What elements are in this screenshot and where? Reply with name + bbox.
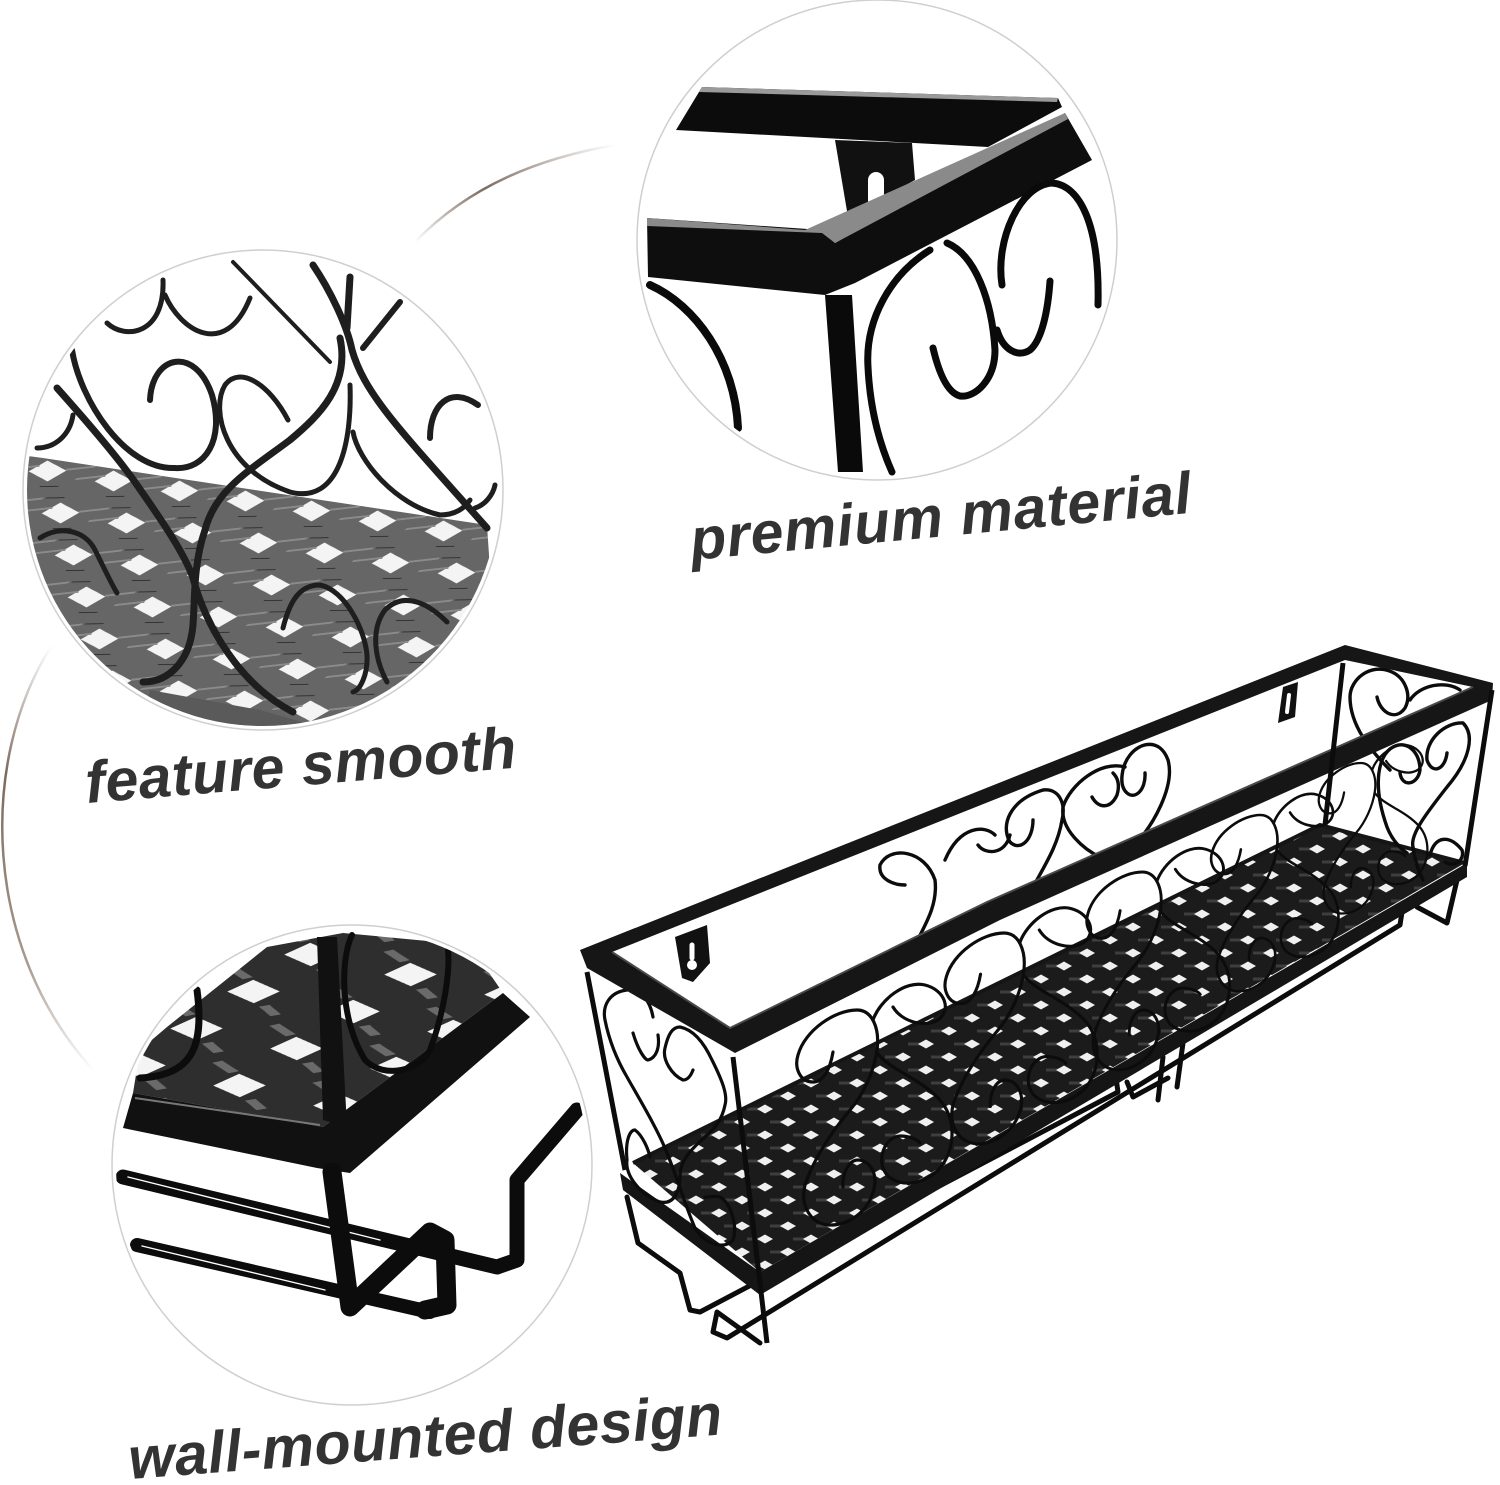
rack back scrolls	[880, 669, 1469, 945]
heading: feature smooth: feature smooth	[83, 715, 519, 816]
panel: wall-mounted design detail circle	[112, 925, 592, 1405]
decorative arc: top	[415, 145, 615, 242]
rack towel bars	[627, 880, 1457, 1343]
rack corner posts	[587, 663, 1492, 1343]
rack shelf lattice	[620, 825, 1467, 1295]
rack top rim	[580, 645, 1493, 1053]
illustration: wall-mounted metal rack	[580, 645, 1493, 1343]
decorative arc: left	[2, 645, 95, 1072]
panel: premium material detail circle	[637, 0, 1117, 480]
heading: premium material: premium material	[685, 460, 1196, 573]
panel: feature smooth detail circle	[20, 250, 503, 730]
rack front wall bracket	[675, 925, 710, 982]
rack front scrolls	[604, 745, 1427, 1245]
rack back wall bracket	[1278, 682, 1298, 723]
